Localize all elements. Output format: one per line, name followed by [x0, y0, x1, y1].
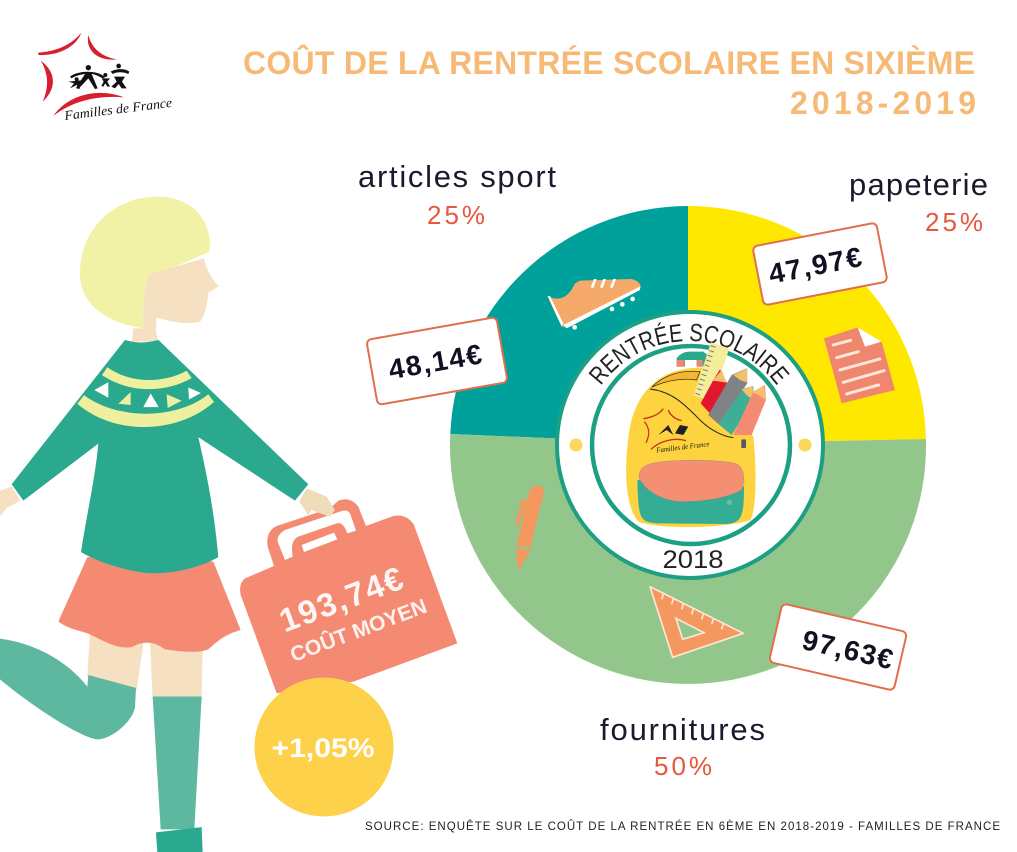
label: fournitures: [600, 712, 765, 781]
price tag: 48,14: [366, 317, 508, 405]
price tag: 47,97: 47,97€: [766, 241, 865, 290]
increase badge: +1,05%: [272, 733, 374, 763]
briefcase label: COÛT MOYEN: [287, 594, 430, 667]
logo: Familles de France: [38, 33, 173, 123]
title: [243, 45, 976, 121]
price tag: 47,97: [752, 223, 888, 305]
increase badge: [254, 678, 394, 816]
girl shoe: [156, 827, 203, 852]
hand on briefcase: [299, 488, 335, 517]
backpack handle: [677, 352, 713, 367]
price tag: 97,63: [769, 603, 907, 691]
girl skirt: [58, 557, 241, 652]
segment: fournitures: [450, 434, 926, 684]
girl left hand: [0, 486, 21, 516]
badge year: 2018: [662, 546, 724, 574]
backpack front pocket: [637, 480, 744, 524]
icon: football boot: [548, 279, 641, 330]
label: articles sport: [358, 159, 556, 230]
backpack ruler: [694, 342, 729, 401]
label: papeterie: papeterie: [849, 167, 988, 202]
title: 2018-2019: [790, 85, 976, 121]
logo: Familles de France: Familles de France: [63, 95, 173, 123]
price tag: 48,14: 48,14€: [386, 338, 485, 385]
backpack pencils: [701, 369, 727, 413]
girl hair: [80, 197, 210, 328]
segment: papeterie: [688, 206, 926, 444]
backpack logo: [643, 409, 686, 449]
backpack body: [626, 368, 756, 527]
girl sweater: [12, 340, 308, 573]
label: articles sport: articles sport: [358, 159, 556, 194]
label: fournitures: fournitures: [600, 712, 765, 747]
label: papeterie: 25%: [925, 207, 983, 237]
icon: set square: [650, 587, 743, 657]
icon: pen: [515, 485, 544, 571]
briefcase amount: 193,74€: [274, 559, 408, 639]
girl socks: [0, 639, 202, 829]
backpack illustration: Familles de France: [655, 439, 711, 455]
badge curved title: RENTRÉE SCOLAIRE: [588, 322, 790, 385]
label: papeterie: [849, 167, 988, 237]
title: COÛT DE LA RENTRÉE SCOLAIRE EN SIXIÈME: [243, 45, 975, 81]
girl illustration: [0, 197, 308, 852]
source note: SOURCE: ENQUÊTE SUR LE COÛT DE LA RENTRÉE EN 6ÈME EN 2018-2019 - FAMILLES DE FRANCE: [365, 820, 1000, 833]
segment: articles sport: [450, 206, 688, 444]
price tag: 97,63: 97,63€: [799, 624, 896, 675]
icon: document: [824, 327, 895, 403]
backpack illustration: [626, 342, 766, 527]
central badge: [555, 310, 825, 580]
label: articles sport: 25%: [427, 200, 485, 230]
label: fournitures: 50%: [654, 751, 712, 781]
girl face and neck: [132, 258, 219, 342]
backpack flap: [633, 388, 753, 460]
briefcase: [240, 488, 457, 693]
donut chart: [450, 206, 926, 684]
girl legs: [87, 630, 203, 699]
